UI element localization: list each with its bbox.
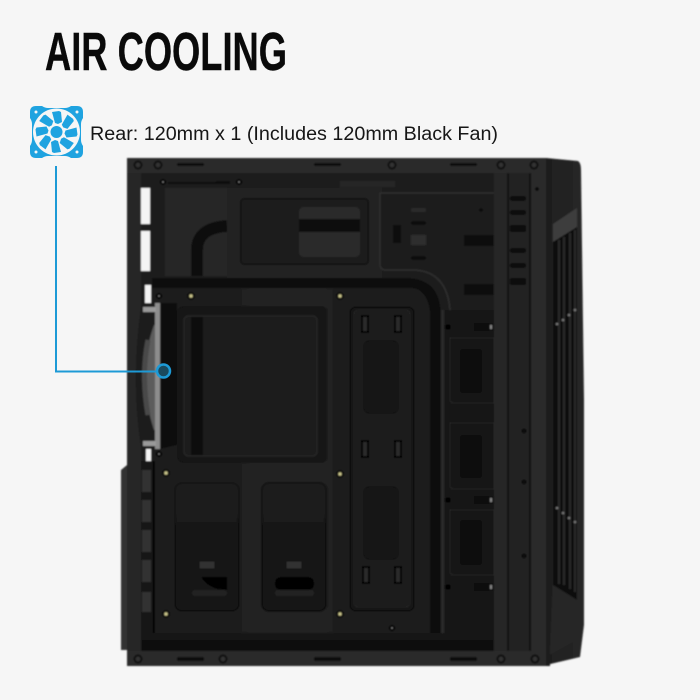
cpu cutout bbox=[178, 307, 326, 462]
upper back wall bbox=[165, 188, 227, 276]
drive cage bbox=[441, 310, 494, 642]
front panel bbox=[546, 158, 584, 665]
upper centre panel bbox=[227, 188, 382, 278]
callout marker bbox=[157, 364, 170, 378]
right tall cutout bbox=[350, 307, 414, 611]
psu bay cutouts bbox=[175, 483, 326, 611]
channel around motherboard tray bbox=[152, 278, 441, 640]
brass standoffs bbox=[163, 293, 343, 617]
bottom rail bbox=[127, 651, 546, 666]
floor bbox=[141, 633, 494, 641]
left rear rail bbox=[127, 158, 141, 666]
fan bbox=[136, 303, 177, 449]
icon: fan bbox=[30, 106, 83, 158]
front pillars bbox=[494, 173, 546, 651]
motherboard tray bbox=[153, 288, 430, 640]
top inner strip bbox=[141, 173, 494, 188]
top rail bbox=[127, 158, 546, 173]
rear bracket and pci slots bbox=[121, 461, 155, 650]
case body bbox=[127, 158, 550, 666]
title: AIR COOLING bbox=[45, 22, 287, 82]
case photo bbox=[121, 158, 584, 666]
leader line bbox=[56, 166, 158, 372]
cable tube bbox=[197, 226, 227, 276]
spec text: Rear: 120mm x 1 (Includes 120mm Black Fan) bbox=[90, 124, 498, 145]
upper right panel bbox=[380, 193, 494, 310]
rear openings bbox=[141, 177, 151, 461]
rail slots bbox=[177, 163, 477, 661]
screws bbox=[134, 162, 538, 662]
